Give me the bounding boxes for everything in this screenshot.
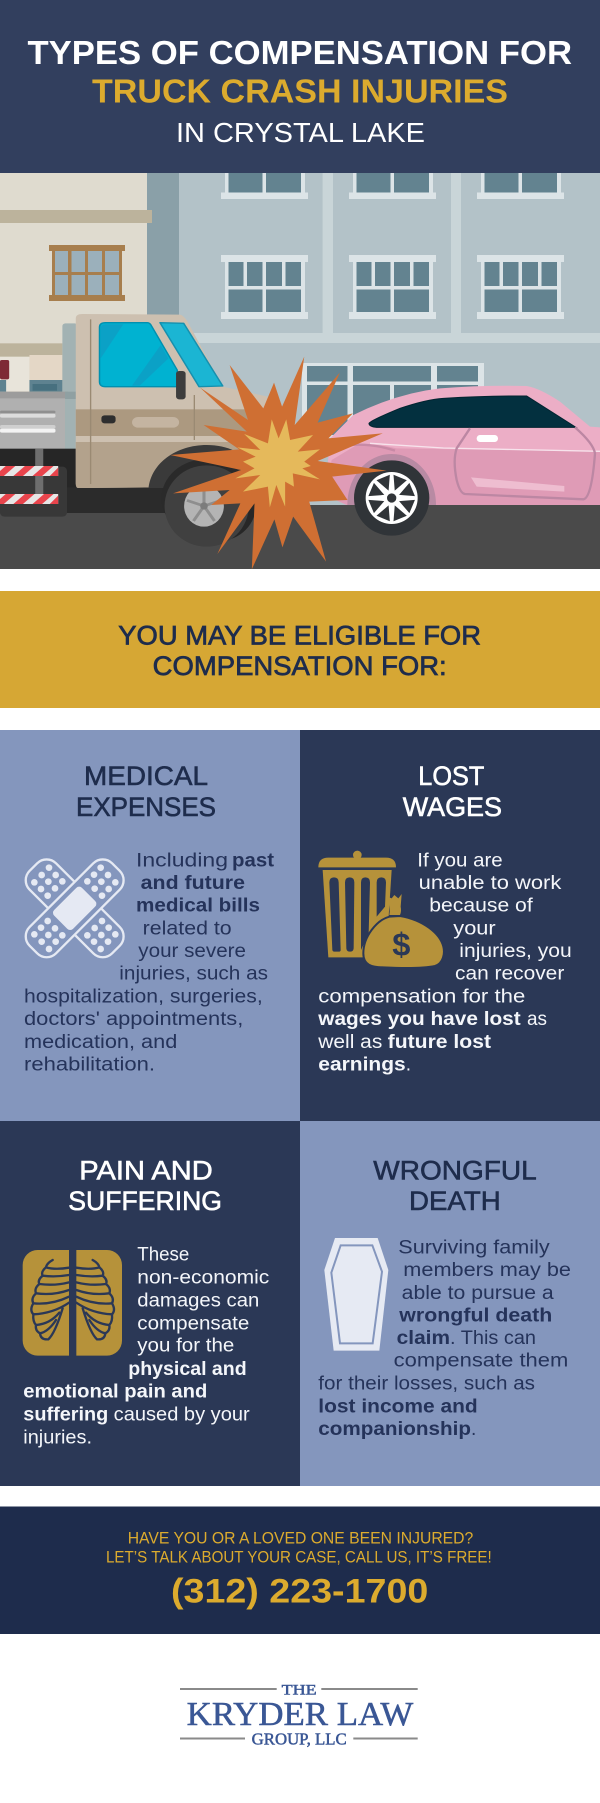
icon: rib cage xyxy=(23,1248,122,1357)
subtitle: in crystal lake: IN CRYSTAL LAKE xyxy=(176,117,425,148)
truck bed xyxy=(62,323,78,450)
body text: pain and suffering: physical and xyxy=(128,1359,247,1380)
gold banner xyxy=(0,591,600,708)
body text: medical expenses: your severe xyxy=(138,941,246,962)
body text: lost wages: unable to work xyxy=(419,873,562,894)
phone number: (312) 223-1700 xyxy=(171,1573,428,1611)
body text: medical expenses: injuries, such as xyxy=(119,964,268,985)
icon: crossed bandages xyxy=(20,854,129,963)
body text: medical expenses: rehabilitation. xyxy=(24,1055,155,1076)
body text: lost wages: because of xyxy=(429,896,533,917)
logo: the kryder law group xyxy=(180,1682,418,1748)
heading: lost wages: WAGES xyxy=(403,792,502,822)
body text: lost wages: . xyxy=(406,1055,411,1076)
header banner xyxy=(0,0,600,173)
body text: medical expenses: related to xyxy=(143,918,232,939)
call to action text: HAVE YOU OR A LOVED ONE BEEN INJURED? xyxy=(128,1529,473,1547)
heading: medical expenses: MEDICAL xyxy=(84,761,208,791)
logo: the kryder law group: GROUP, LLC xyxy=(252,1729,347,1748)
tan building window xyxy=(49,245,125,301)
building windows xyxy=(221,173,564,438)
call to action banner xyxy=(0,1506,600,1634)
body text: pain and suffering xyxy=(23,1245,269,1448)
logo: the kryder law group: KRYDER LAW xyxy=(187,1696,414,1733)
body text: wrongful death: able to pursue a xyxy=(402,1283,554,1304)
body text: medical expenses: medication, and xyxy=(24,1032,177,1053)
body text: wrongful death: compensate them xyxy=(394,1351,568,1372)
body text: wrongful death: Surviving family xyxy=(398,1237,550,1258)
heading: lost wages: LOST xyxy=(418,761,484,791)
body text: medical expenses: hospitalization, surgeries, xyxy=(24,987,263,1008)
heading: pain and suffering: PAIN AND xyxy=(79,1155,213,1185)
panel: pain and suffering xyxy=(0,1121,300,1486)
body text: lost wages: wages you have lost xyxy=(317,1009,521,1030)
side window xyxy=(100,323,177,387)
car window xyxy=(369,396,576,427)
body text: lost wages: earnings xyxy=(318,1055,406,1076)
body text: wrongful death: members may be xyxy=(403,1260,571,1281)
body text: lost wages xyxy=(317,851,572,1076)
door xyxy=(455,427,595,499)
road xyxy=(0,505,600,569)
windshield xyxy=(160,323,223,387)
body text: pain and suffering: suffering xyxy=(23,1404,108,1425)
body text: lost wages: as xyxy=(527,1009,547,1030)
body text: lost wages: injuries, you xyxy=(459,941,572,962)
body text: medical expenses: past xyxy=(232,851,275,872)
panel: lost wages xyxy=(300,730,600,1121)
truck xyxy=(0,314,268,547)
chassis xyxy=(0,449,78,489)
body text: wrongful death: . This can xyxy=(450,1328,536,1349)
body text: pain and suffering: compensate xyxy=(137,1313,249,1334)
banner text xyxy=(118,620,481,681)
body text: pain and suffering: emotional pain and xyxy=(23,1382,207,1403)
cab xyxy=(76,314,268,488)
body text: wrongful death: . xyxy=(471,1419,476,1440)
explosion xyxy=(170,357,387,569)
title line: types of compensation: TYPES OF COMPENSATION FOR xyxy=(28,35,572,72)
logo: the kryder law group: THE xyxy=(282,1682,317,1698)
pink car xyxy=(325,386,600,536)
call to action text: LET’S TALK ABOUT YOUR CASE, CALL US, IT’S FREE! xyxy=(106,1548,492,1566)
body text: medical expenses: Including xyxy=(136,851,228,872)
heading: medical expenses xyxy=(76,761,216,822)
icon: coffin xyxy=(324,1238,388,1351)
panel: wrongful death xyxy=(300,1121,600,1486)
panel: medical expenses xyxy=(0,730,300,1121)
body text: wrongful death: lost income and xyxy=(318,1396,478,1417)
heading: wrongful death: DEATH xyxy=(409,1186,501,1216)
buildings background xyxy=(0,173,600,505)
body text: medical expenses xyxy=(24,851,275,1076)
icon: trash can and money bag: $ xyxy=(392,925,410,962)
body text: wrongful death: claim xyxy=(397,1328,450,1349)
body text: medical expenses: doctors' appointments, xyxy=(24,1009,243,1030)
body text: lost wages: compensation for the xyxy=(318,987,525,1008)
heading: wrongful death: WRONGFUL xyxy=(373,1155,537,1185)
front wheel xyxy=(148,445,264,547)
heading: wrongful death xyxy=(373,1155,537,1216)
cargo on the truck bed xyxy=(0,343,62,393)
body text: wrongful death xyxy=(318,1237,571,1440)
body text: lost wages: If you are xyxy=(417,851,503,872)
mirror xyxy=(176,371,186,399)
heading: medical expenses: EXPENSES xyxy=(76,792,216,822)
body text: lost wages: well as xyxy=(317,1032,382,1053)
banner text: COMPENSATION FOR: xyxy=(153,651,447,681)
body text: wrongful death: for their losses, such as xyxy=(318,1373,535,1394)
body text: medical expenses: and future xyxy=(141,873,245,894)
illustration: truck crashing into pink car on a city street xyxy=(0,173,600,569)
title line: truck crash injuries: TRUCK CRASH INJURIES xyxy=(92,74,508,111)
body text: pain and suffering: caused by your xyxy=(114,1404,250,1425)
warning stripes bumper xyxy=(0,466,58,504)
body text: wrongful death: wrongful death xyxy=(398,1305,552,1326)
body text: lost wages: your xyxy=(453,918,496,939)
body text: pain and suffering: damages can xyxy=(137,1291,259,1312)
body text: pain and suffering: you for the xyxy=(137,1336,234,1357)
call to action text xyxy=(106,1529,492,1566)
body text: pain and suffering: These xyxy=(137,1245,189,1266)
body text: lost wages: future lost xyxy=(388,1032,492,1053)
icon: trash can and money bag xyxy=(318,851,444,968)
body text: wrongful death: companionship xyxy=(318,1419,471,1440)
body text: pain and suffering: injuries. xyxy=(23,1427,92,1448)
heading: pain and suffering xyxy=(68,1155,222,1216)
heading: pain and suffering: SUFFERING xyxy=(68,1186,222,1216)
car wheel xyxy=(347,454,436,536)
body text: medical expenses: medical bills xyxy=(136,896,260,917)
body text: lost wages: can recover xyxy=(455,964,565,985)
banner text: YOU MAY BE ELIGIBLE FOR xyxy=(118,620,481,650)
heading: lost wages xyxy=(403,761,502,822)
body text: pain and suffering: non-economic xyxy=(137,1267,269,1288)
